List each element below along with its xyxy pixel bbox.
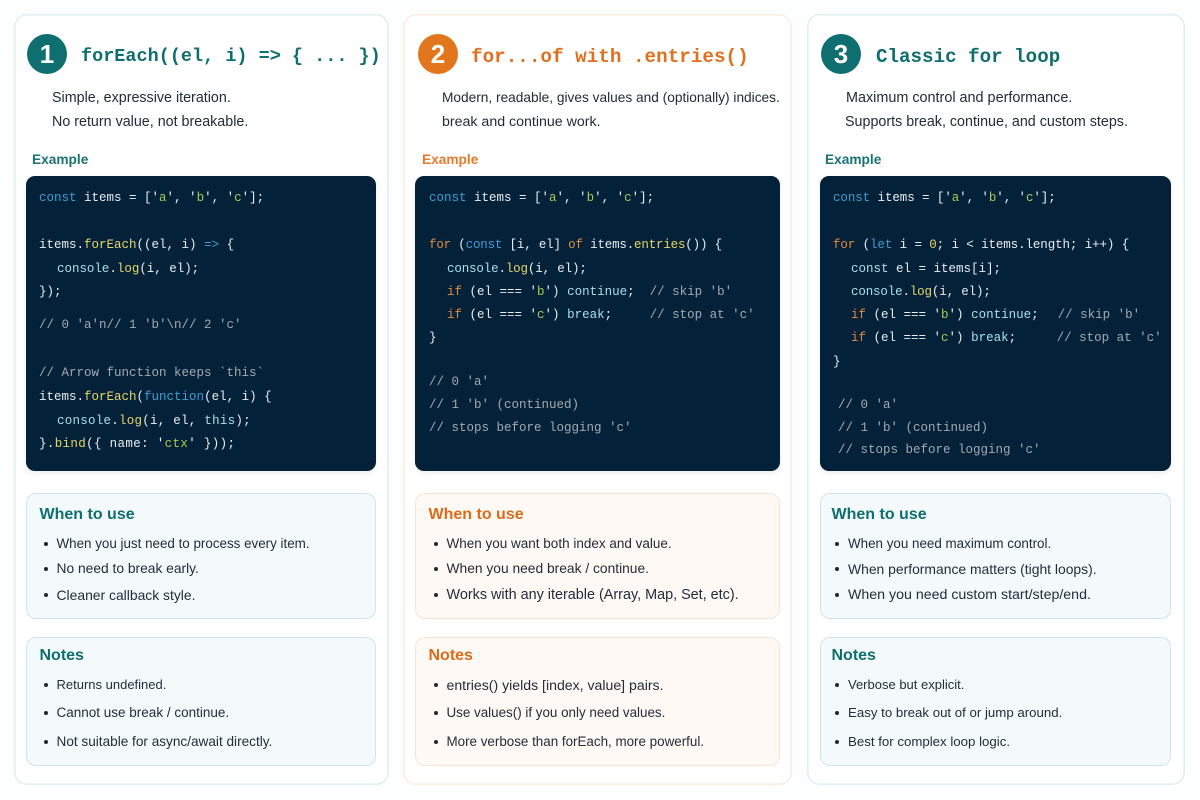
- example label: Example: [422, 152, 478, 167]
- code block: classic for example: // 0 'a': [838, 398, 898, 412]
- code block: forEach example: items.forEach((el, i) => {: [39, 238, 234, 252]
- description line 2: Supports break, continue, and custom steps.: [845, 114, 1128, 130]
- code block: for...of example: console.log(i, el);: [447, 262, 587, 276]
- description line 1: Simple, expressive iteration.: [52, 90, 231, 106]
- description line 2: No return value, not breakable.: [52, 114, 248, 130]
- bullet list: when to use: When you need break / continue.: [446, 560, 649, 576]
- bullet list: when to use: [835, 536, 1097, 602]
- bullet list: notes: More verbose than forEach, more powerful.: [446, 734, 704, 748]
- bullet list: notes: entries() yields [index, value] pairs.: [446, 676, 663, 692]
- code block: for...of example: const items = ['a', 'b', 'c'];: [429, 191, 654, 205]
- bullet list: when to use: [44, 536, 310, 603]
- bullet list: when to use: No need to break early.: [56, 560, 199, 576]
- heading: when to use: When to use: [832, 506, 927, 522]
- step number 3 badge: 3: [834, 39, 848, 69]
- bullet list: notes: [434, 676, 704, 749]
- heading: notes: Notes: [40, 646, 84, 664]
- heading: when to use: When to use: [40, 506, 135, 522]
- bullet list: notes: Best for complex loop logic.: [848, 734, 1010, 748]
- code block: for...of example: // stops before logging 'c': [429, 421, 632, 435]
- bullet list: when to use: When you want both index and value.: [446, 536, 672, 550]
- bullet list: notes: Cannot use break / continue.: [56, 704, 229, 720]
- code block: forEach example: }.bind({ name: 'ctx' }));: [39, 437, 235, 451]
- code block: classic for example: for (let i = 0; i < items.length; i++) {: [833, 238, 1129, 252]
- code block: classic for example: }: [833, 355, 841, 369]
- panel: when to use: [820, 493, 1171, 619]
- step number 2 badge: 2: [431, 39, 445, 69]
- bullet list: when to use: When performance matters (tight loops).: [848, 560, 1097, 576]
- code block: forEach example: });: [39, 285, 62, 299]
- code block: for...of example: if (el === 'b') continue; // skip 'b': [447, 285, 732, 299]
- code block: for...of example: // 1 'b' (continued): [429, 398, 579, 412]
- code block: for...of example: }: [429, 331, 437, 345]
- code block: for...of example: // 0 'a': [429, 375, 489, 389]
- code block: forEach example: [26, 176, 376, 471]
- bullet list: when to use: Cleaner callback style.: [56, 586, 195, 602]
- code block: classic for example: console.log(i, el);: [851, 285, 991, 299]
- bullet list: notes: Easy to break out of or jump around.: [848, 704, 1062, 720]
- code block: forEach example: // Arrow function keeps `this`: [39, 366, 264, 380]
- heading: notes: Notes: [832, 646, 876, 664]
- panel: for...of: [403, 14, 792, 785]
- step number 2 badge: [418, 34, 458, 74]
- code block: forEach example: // 0 'a'n// 1 'b'\n// 2 'c': [39, 318, 242, 332]
- bullet list: notes: Use values() if you only need values.: [446, 704, 665, 720]
- code block: classic for example: if (el === 'c') break; // stop at 'c': [851, 331, 1162, 345]
- bullet list: when to use: When you just need to process every item.: [56, 536, 310, 550]
- code block: classic for example: const el = items[i];: [851, 262, 1001, 276]
- code block: classic for example: // stops before logging 'c': [838, 443, 1041, 457]
- bullet list: notes: [44, 676, 272, 749]
- step number 1 badge: [27, 34, 67, 74]
- panel: classic for loop: [807, 14, 1185, 785]
- bullet list: notes: Verbose but explicit.: [848, 676, 964, 692]
- bullet list: when to use: [434, 536, 739, 602]
- code block: forEach example: items.forEach(function(el, i) {: [39, 390, 272, 404]
- code block: forEach example: const items = ['a', 'b', 'c'];: [39, 191, 264, 205]
- bullet list: when to use: Works with any iterable (Array, Map, Set, etc).: [446, 586, 739, 602]
- heading: notes: Notes: [428, 646, 473, 664]
- example label: Example: [32, 152, 88, 167]
- code block: classic for example: [820, 176, 1171, 471]
- panel: forEach: [14, 14, 389, 785]
- bullet list: when to use: When you need maximum control.: [848, 536, 1051, 550]
- bullet list: notes: [835, 676, 1062, 748]
- code block: classic for example: // 1 'b' (continued): [838, 421, 988, 435]
- panel: notes: [820, 637, 1171, 766]
- panel: notes: [26, 637, 376, 766]
- code block: for...of example: [415, 176, 780, 471]
- panel: when to use: [26, 493, 376, 619]
- bullet list: when to use: When you need custom start/step/end.: [848, 586, 1091, 602]
- code block: forEach example: console.log(i, el, this);: [57, 414, 251, 428]
- code block: classic for example: const items = ['a', 'b', 'c'];: [833, 191, 1056, 205]
- step number 1 badge: 1: [40, 39, 54, 69]
- panel: when to use: [415, 493, 780, 619]
- code block: forEach example: console.log(i, el);: [57, 262, 199, 276]
- example label: Example: [825, 152, 881, 167]
- description line 2: break and continue work.: [442, 114, 601, 130]
- description line 1: Modern, readable, gives values and (optionally) indices.: [442, 90, 780, 105]
- heading: forEach: forEach((el, i) => { ... }): [81, 46, 381, 67]
- bullet list: notes: Returns undefined.: [56, 676, 166, 692]
- heading: when to use: When to use: [428, 506, 524, 522]
- code block: classic for example: if (el === 'b') continue; // skip 'b': [851, 308, 1140, 322]
- step number 3 badge: [821, 34, 861, 74]
- panel: notes: [415, 637, 780, 766]
- code block: for...of example: for (const [i, el] of items.entries()) {: [429, 238, 722, 252]
- heading: classic for loop: Classic for loop: [876, 46, 1060, 68]
- description line 1: Maximum control and performance.: [846, 90, 1072, 106]
- bullet list: notes: Not suitable for async/await directly.: [56, 734, 272, 748]
- code block: for...of example: if (el === 'c') break; // stop at 'c': [447, 308, 755, 322]
- heading: for...of: for...of with .entries(): [471, 46, 749, 68]
